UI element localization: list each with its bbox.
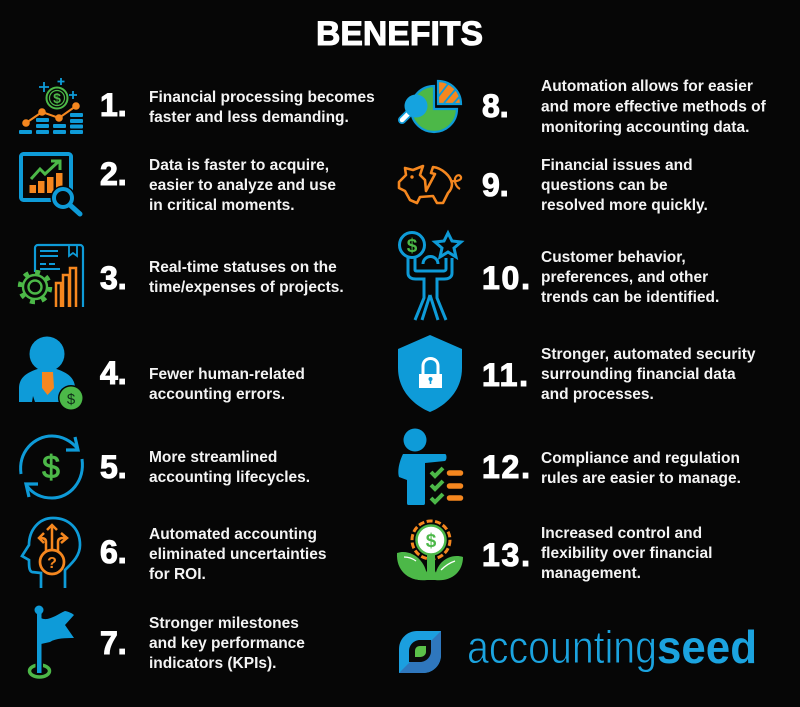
number 2: 2. bbox=[100, 156, 127, 192]
number 13: 13. bbox=[482, 537, 530, 573]
icon: document, gear and bars bbox=[20, 245, 83, 307]
text 13: Increased control and bbox=[541, 525, 702, 542]
text 8: Automation allows for easier bbox=[541, 78, 753, 95]
text 9: Financial issues and bbox=[541, 157, 693, 174]
number 10: 10. bbox=[482, 260, 530, 296]
text 5: More streamlined bbox=[149, 449, 277, 466]
text 4: accounting errors. bbox=[149, 386, 285, 403]
icon: person lifting coin and star: $ bbox=[407, 236, 418, 257]
text 12: Compliance and regulation bbox=[541, 450, 740, 467]
text 10: preferences, and other bbox=[541, 269, 708, 286]
text 8: and more effective methods of bbox=[541, 98, 767, 116]
number 7: 7. bbox=[100, 625, 127, 661]
benefit 3 bbox=[20, 245, 344, 307]
icon: coins and growth line bbox=[19, 78, 83, 134]
benefit 13 bbox=[397, 521, 712, 582]
icon: dollar in cycle arrows bbox=[21, 436, 82, 498]
text 6: eliminated uncertainties bbox=[149, 546, 326, 563]
text 7: indicators (KPIs). bbox=[149, 655, 276, 672]
icon: person with tie and coin bbox=[19, 336, 84, 411]
icon: money plant: $ bbox=[426, 531, 437, 552]
text 9: resolved more quickly. bbox=[541, 197, 708, 214]
benefit 7 bbox=[30, 606, 305, 677]
text 6: for ROI. bbox=[149, 566, 206, 583]
icon: flag on green base bbox=[30, 606, 74, 677]
title: BENEFITS bbox=[316, 15, 483, 53]
benefit 9 bbox=[399, 157, 708, 214]
text 10: Customer behavior, bbox=[541, 249, 686, 266]
text 10: trends can be identified. bbox=[541, 289, 719, 306]
text 8: monitoring accounting data. bbox=[541, 119, 749, 136]
benefit 10 bbox=[400, 232, 719, 320]
icon: chart under magnifier bbox=[21, 154, 80, 214]
number 6: 6. bbox=[100, 534, 127, 570]
text 7: Stronger milestones bbox=[149, 615, 299, 632]
icon: shield with padlock bbox=[398, 335, 462, 412]
logo mark bbox=[399, 631, 441, 673]
text 2: Data is faster to acquire, bbox=[149, 157, 329, 174]
logo: accountingseed bbox=[399, 621, 757, 673]
number 1: 1. bbox=[100, 87, 127, 123]
number 11: 11. bbox=[482, 357, 528, 393]
benefit 8 bbox=[402, 78, 767, 136]
icon: coins and growth line: $ bbox=[53, 90, 61, 106]
text 4: Fewer human-related bbox=[149, 366, 305, 383]
text 11: Stronger, automated security bbox=[541, 346, 756, 363]
icon: dollar in cycle arrows: $ bbox=[42, 449, 60, 485]
number 9: 9. bbox=[482, 167, 509, 203]
benefit 12 bbox=[398, 428, 741, 505]
icon: broken piggy bank bbox=[399, 166, 461, 203]
benefit 11 bbox=[398, 335, 756, 412]
text 3: time/expenses of projects. bbox=[149, 279, 344, 296]
text 11: and processes. bbox=[541, 386, 654, 403]
benefit 2 bbox=[21, 154, 336, 214]
text 1: Financial processing becomes bbox=[149, 89, 375, 106]
icon: money plant bbox=[397, 521, 463, 580]
text 1: faster and less demanding. bbox=[149, 109, 349, 126]
icon: head with decision arrows: ? bbox=[47, 555, 57, 572]
number 3: 3. bbox=[100, 260, 127, 296]
text 6: Automated accounting bbox=[149, 526, 317, 543]
text 12: rules are easier to manage. bbox=[541, 470, 741, 487]
benefit 1 bbox=[19, 78, 375, 134]
benefit 4 bbox=[19, 336, 305, 411]
text 2: in critical moments. bbox=[149, 197, 295, 214]
number 8: 8. bbox=[482, 88, 509, 124]
text 7: and key performance bbox=[149, 635, 305, 652]
text 13: management. bbox=[541, 565, 641, 582]
number 5: 5. bbox=[100, 449, 127, 485]
logo wordmark bold: seed bbox=[657, 621, 757, 673]
icon: head with decision arrows bbox=[22, 518, 80, 588]
text 9: questions can be bbox=[541, 177, 668, 194]
logo wordmark light: accounting bbox=[467, 621, 657, 673]
text 11: surrounding financial data bbox=[541, 366, 736, 383]
icon: person with checklist bbox=[398, 428, 460, 505]
text 2: easier to analyze and use bbox=[149, 177, 336, 194]
icon: person lifting coin and star bbox=[400, 232, 461, 320]
benefit 6 bbox=[22, 518, 326, 588]
icon: pie chart with magnifier bbox=[402, 81, 461, 132]
text 13: flexibility over financial bbox=[541, 545, 712, 562]
number 4: 4. bbox=[100, 355, 127, 391]
icon: person with tie and coin: $ bbox=[67, 391, 76, 408]
benefit 5 bbox=[21, 436, 310, 498]
number 12: 12. bbox=[482, 449, 530, 485]
text 3: Real-time statuses on the bbox=[149, 259, 337, 276]
text 5: accounting lifecycles. bbox=[149, 469, 310, 486]
